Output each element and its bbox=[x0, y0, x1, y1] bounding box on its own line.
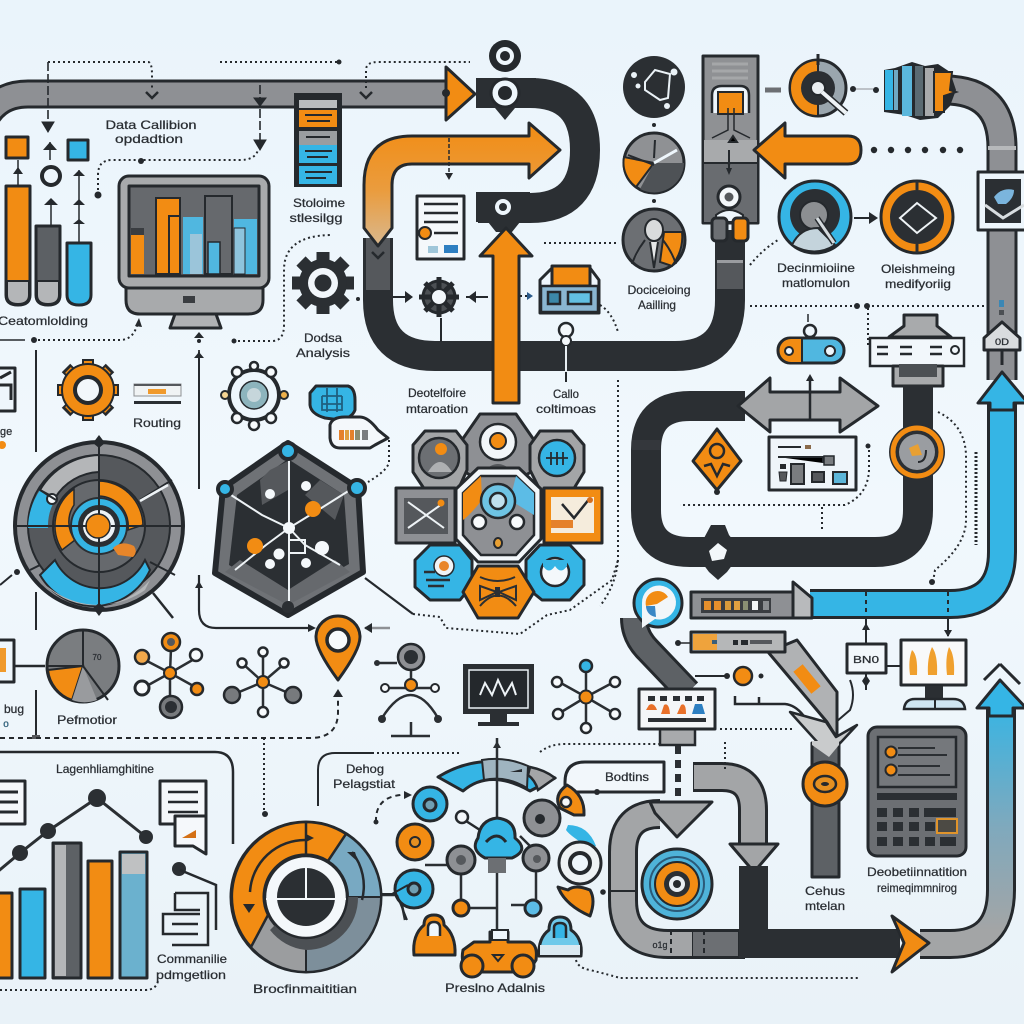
node: orange 1 bbox=[397, 824, 433, 860]
bottom left blue cell bbox=[415, 545, 472, 600]
pill device bbox=[778, 314, 844, 363]
gray loop pipe with arrow bbox=[610, 802, 745, 958]
right image cell bbox=[544, 488, 602, 543]
label frame debug: Pelagstiat bbox=[333, 777, 396, 791]
right gray pipe bbox=[945, 90, 1016, 380]
node: white ring bbox=[559, 842, 601, 884]
folder box icon bbox=[520, 266, 618, 382]
dark loop junction bbox=[703, 525, 733, 580]
bottom orange cell bbox=[463, 566, 534, 618]
icon: clock circle bbox=[623, 133, 684, 193]
orange ring circle bbox=[881, 181, 953, 253]
left cut-off label and icons bbox=[0, 350, 45, 739]
label: ring chart: Brocfinmaititian bbox=[253, 982, 357, 996]
dark gray column with orange ring bbox=[803, 741, 847, 877]
label frame debug: Dehog bbox=[346, 762, 384, 776]
arrow between circles bbox=[854, 212, 878, 224]
gray pipe down with arrow and dark pipe bbox=[693, 742, 929, 972]
icon: person circle bbox=[623, 209, 685, 271]
pie chart bbox=[47, 630, 119, 702]
dot row bbox=[871, 147, 963, 153]
node: gray 3 bbox=[523, 845, 549, 871]
gear outline icon bbox=[221, 362, 288, 430]
blue gauge circle bbox=[779, 181, 851, 253]
label: data collection: opdadtion bbox=[115, 132, 183, 146]
dashed route bottom left bbox=[0, 689, 343, 817]
label: decisioning bbox=[628, 283, 690, 312]
orange gear left bbox=[57, 359, 119, 421]
gray arrow pipeline bottom right bbox=[920, 664, 1024, 944]
radar chart bbox=[0, 435, 183, 618]
orange left arrow bbox=[754, 123, 861, 178]
line bbox=[0, 789, 153, 873]
knot on dark pipe bbox=[476, 192, 530, 232]
label: documentation bbox=[867, 865, 967, 895]
label: communities bbox=[0, 952, 227, 990]
label: documentation: reimeqimmnirog bbox=[877, 881, 957, 895]
top left cell bbox=[413, 431, 467, 490]
line-and-bar chart panel bbox=[0, 752, 233, 978]
label: communities: Commanilie bbox=[157, 952, 227, 966]
location pin bbox=[316, 616, 390, 680]
node: blue 2 bbox=[395, 870, 433, 908]
flow chart box bbox=[769, 437, 856, 490]
node: orange cart bbox=[461, 930, 536, 977]
dotted connectors upper left bbox=[0, 150, 330, 435]
gray loop pipe with arrow: o1g bbox=[652, 940, 668, 950]
orange diamond icon bbox=[693, 429, 741, 495]
label: data analysis: Dodsa bbox=[304, 331, 342, 345]
target circle bbox=[642, 849, 712, 919]
labels: centre: coltimoas bbox=[536, 402, 596, 416]
orange bar and diagonal pipe bbox=[675, 632, 837, 738]
label: storage: Stoloime bbox=[293, 196, 345, 210]
network cluster bottom bbox=[378, 738, 606, 977]
tall gray column bbox=[703, 56, 758, 241]
big ring chart bbox=[231, 822, 408, 972]
right doc bbox=[160, 781, 206, 854]
left test tube chart bbox=[6, 137, 91, 305]
left doc bbox=[0, 781, 25, 824]
node: ring small bbox=[456, 811, 483, 832]
tag on right pipe: 0D bbox=[995, 337, 1010, 347]
node: blue 1 bbox=[413, 787, 447, 821]
network icon 4 bbox=[552, 660, 620, 733]
node: orange leaf bbox=[558, 887, 593, 916]
bracket bbox=[163, 862, 216, 945]
label: data analysis bbox=[296, 331, 350, 360]
labels: centre bbox=[406, 386, 596, 416]
node: blue small bbox=[525, 900, 541, 916]
small label box bbox=[847, 618, 952, 690]
label: documentation: Deobetiinnatition bbox=[867, 865, 967, 879]
labels: right top: medifyoriig bbox=[885, 277, 951, 291]
node: lock orange bbox=[414, 915, 455, 955]
dotted bottom line bbox=[576, 960, 858, 978]
circle icons column bbox=[623, 56, 685, 271]
label: decisioning: Dociceioing bbox=[628, 283, 690, 297]
top right cell bbox=[530, 431, 584, 490]
gray curved feeder pipe bbox=[634, 618, 688, 692]
left cut-off label and icons: bug bbox=[4, 702, 24, 716]
dial icon top bbox=[765, 54, 879, 116]
blue connector icon bbox=[884, 62, 956, 120]
labels: right top: Oleishmeing bbox=[881, 262, 955, 276]
pie chart: 70 bbox=[93, 653, 102, 662]
small monitor bbox=[463, 664, 534, 726]
routing bars: Routing bbox=[133, 416, 181, 430]
vertical arrows central left bbox=[195, 352, 316, 632]
labels: right top: matlomulon bbox=[782, 276, 850, 290]
hexagon network bbox=[215, 443, 618, 634]
calculator panel bbox=[868, 727, 966, 856]
orange dot with line bbox=[695, 667, 764, 685]
network icon 2 bbox=[224, 648, 301, 717]
labels: centre: mtaroation bbox=[406, 402, 468, 416]
node: blue leaf bbox=[566, 825, 596, 848]
network icon 3 bbox=[374, 644, 442, 736]
node: gray 2 bbox=[524, 800, 560, 836]
node: gray 1 bbox=[447, 846, 475, 874]
orange return arrow bbox=[364, 123, 560, 258]
document icon bbox=[417, 196, 464, 259]
shield box bbox=[978, 172, 1024, 230]
labels: centre: Callo bbox=[553, 387, 579, 401]
gray double arrow bbox=[738, 374, 878, 432]
label: storage: stlesilgg bbox=[290, 211, 342, 225]
routing bars bbox=[133, 384, 181, 430]
monitor with bar chart bbox=[119, 176, 269, 328]
node: orange pin bbox=[558, 785, 584, 815]
dark pipe main loop bbox=[378, 230, 743, 356]
bars bbox=[0, 843, 147, 978]
label: storage bbox=[290, 196, 345, 225]
label frame debug bbox=[318, 753, 460, 824]
gray display strip bbox=[691, 582, 812, 618]
machine top bbox=[870, 315, 964, 386]
small label box: BN0 bbox=[853, 655, 880, 666]
label: decisioning: Aailling bbox=[638, 298, 676, 312]
storage stack bbox=[294, 93, 342, 187]
top gray pipeline bbox=[0, 60, 475, 150]
orange bars monitor bbox=[901, 640, 966, 709]
top hex cell bbox=[462, 414, 534, 480]
circle gauge on pipe bbox=[889, 424, 945, 480]
tag on right pipe bbox=[984, 300, 1020, 365]
dotted right loops bbox=[600, 380, 976, 606]
labels: right top: Decinmioiine bbox=[777, 261, 855, 275]
node: blue person bbox=[475, 818, 522, 873]
chevron arrow and connector line bbox=[735, 680, 857, 755]
gear icon bbox=[292, 252, 354, 314]
blue chip and speech bubble bbox=[310, 386, 389, 487]
top gauge arc bbox=[438, 759, 555, 791]
label: status: Cehus bbox=[805, 884, 845, 898]
label: predict: Preslno Adalnis bbox=[445, 981, 545, 995]
label: data analysis: Analysis bbox=[296, 346, 350, 360]
label: performance: Pefmotior bbox=[57, 713, 117, 727]
box: label tab bbox=[565, 762, 664, 795]
bottom right blue cell bbox=[526, 545, 584, 600]
display with stand bbox=[540, 689, 795, 802]
hexagon cluster icon bbox=[396, 414, 602, 618]
label: data collection: Data Callibion bbox=[106, 118, 196, 132]
label: status: mtelan bbox=[805, 899, 845, 913]
labels: centre: Deotelfoire bbox=[408, 386, 466, 400]
centre octagon bbox=[456, 468, 541, 562]
network icon 1 bbox=[135, 633, 203, 718]
left image cell bbox=[396, 488, 455, 543]
node: lock blue bbox=[539, 917, 581, 956]
label: status bbox=[805, 884, 845, 913]
blue pipe with arrow bbox=[810, 372, 1024, 618]
icon: network circle bbox=[623, 56, 685, 118]
line-and-bar chart panel: Lagenhliamghitine bbox=[56, 762, 154, 776]
dotted lines right top bbox=[544, 240, 985, 345]
label: data collection bbox=[106, 118, 196, 146]
icon: top node stack bbox=[476, 40, 536, 120]
speech ring icon bbox=[634, 579, 682, 628]
dark loop pipe top bbox=[478, 93, 585, 208]
dark loop right bbox=[632, 385, 918, 552]
orange upward arrow bbox=[480, 228, 532, 403]
node: orange small bbox=[453, 900, 469, 916]
left cut-off label and icons: o bbox=[3, 719, 9, 730]
label: left chart: Ceatomlolding bbox=[0, 314, 88, 328]
label: communities: pdmgetlion bbox=[156, 968, 226, 982]
box: label tab: Bodtins bbox=[605, 770, 649, 784]
labels: right top bbox=[777, 261, 955, 291]
small gear and arrows bbox=[356, 277, 488, 342]
